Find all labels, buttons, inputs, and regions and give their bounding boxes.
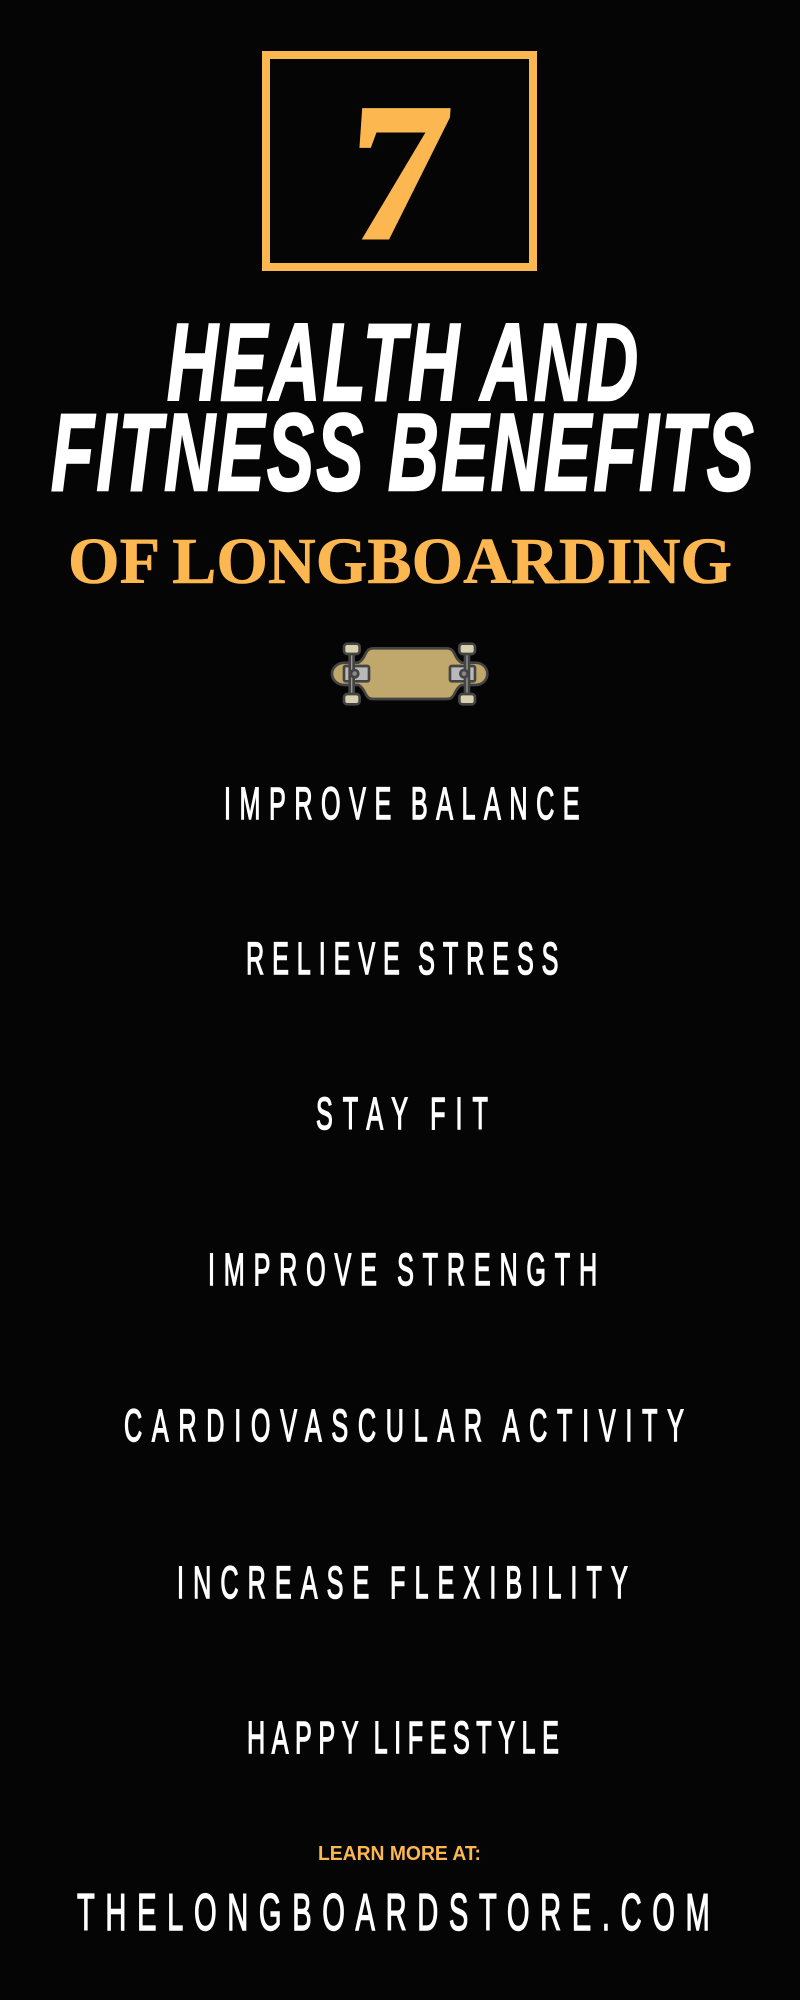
benefit: relieve stress: RELIEVE STRESS: [246, 933, 558, 984]
title: [51, 300, 754, 514]
benefits list: [124, 778, 684, 1763]
number badge: [266, 55, 533, 281]
benefit: stay fit: STAY FIT: [316, 1088, 488, 1139]
numeral 7: 7: [340, 65, 457, 281]
benefit: improve balance: IMPROVE BALANCE: [224, 778, 580, 829]
icon: longboard: [332, 644, 487, 704]
subtitle: OF LONGBOARDING: [68, 525, 732, 598]
benefit: improve strength: IMPROVE STRENGTH: [208, 1244, 597, 1295]
website url: THELONGBOARDSTORE.COM: [77, 1883, 710, 1941]
title: FITNESS BENEFITS: [51, 390, 754, 514]
title: HEALTH AND: [167, 300, 638, 424]
call to action label: LEARN MORE AT:: [318, 1843, 481, 1865]
benefit: increase flexibility: INCREASE FLEXIBILITY: [177, 1557, 628, 1608]
benefit: cardiovascular activity: CARDIOVASCULAR ACTIVITY: [124, 1400, 684, 1451]
benefit: happy lifestyle: HAPPY LIFESTYLE: [247, 1712, 559, 1763]
